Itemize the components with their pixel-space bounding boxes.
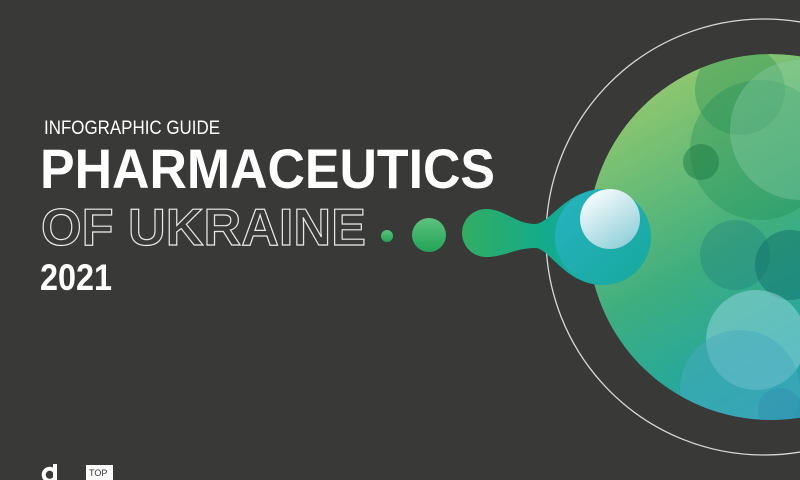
outline ring — [546, 19, 800, 455]
logo: top badge — [86, 465, 113, 480]
big bubble circle — [594, 54, 800, 420]
heading: infographic guide: INFOGRAPHIC GUIDE — [44, 118, 220, 139]
title: pharmaceutics: PHARMACEUTICS — [40, 137, 495, 200]
year: 2021 — [40, 257, 112, 298]
green dots — [381, 218, 446, 252]
title: of ukraine outline: OF UKRAINE — [41, 199, 366, 257]
logo: d mark — [44, 464, 55, 480]
blue ball — [555, 189, 651, 285]
drop connector — [462, 189, 603, 285]
logo: top badge: TOP — [89, 468, 107, 478]
